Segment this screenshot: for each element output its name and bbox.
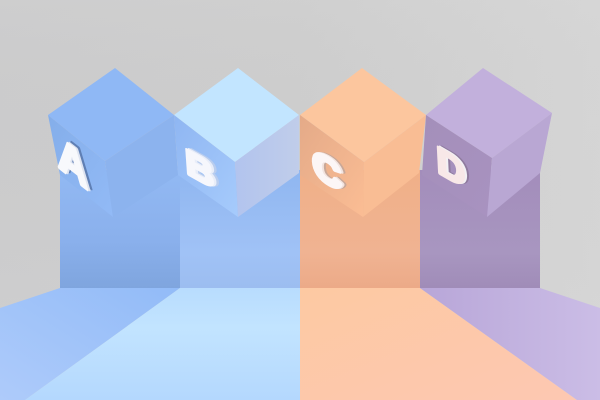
panel: D wall and floor strip [420,170,600,400]
letter D: D [439,138,470,197]
letter D: D [435,138,466,197]
letter C: C [315,141,346,200]
letter B: B [189,141,220,197]
letter B: B [186,141,218,197]
letter A: A [60,124,93,200]
panel: C wall and floor strip [300,170,577,400]
cube C [300,68,426,217]
panel: B wall and floor strip [25,170,300,400]
cube B [174,68,299,217]
letter B: B [184,141,215,197]
panel: A wall and floor strip [0,170,180,400]
letter C: C [311,141,342,200]
cube A [48,68,178,217]
letter D: D [437,138,468,197]
letter A: A [56,125,89,201]
letter A: A [58,125,91,201]
letter C: C [313,141,344,200]
cube D [422,68,552,217]
